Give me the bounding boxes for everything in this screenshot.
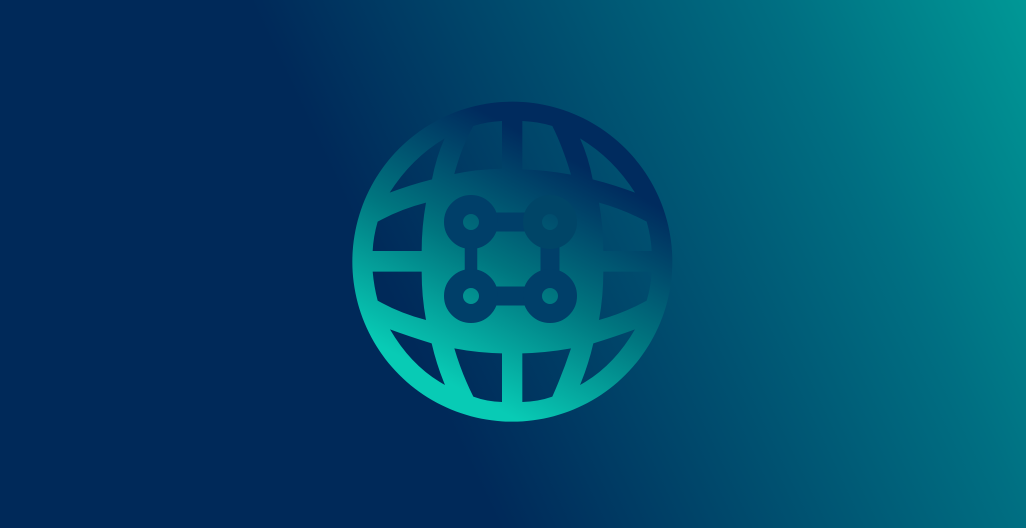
icon: globe with network bbox=[352, 102, 672, 422]
network node bottom left bbox=[454, 278, 488, 314]
connector lines bbox=[471, 222, 550, 296]
network node top left bbox=[454, 204, 488, 240]
network node bottom right bbox=[532, 278, 568, 314]
network diagram bbox=[454, 204, 568, 314]
globe grid bbox=[352, 102, 672, 422]
network node top right bbox=[532, 204, 568, 240]
